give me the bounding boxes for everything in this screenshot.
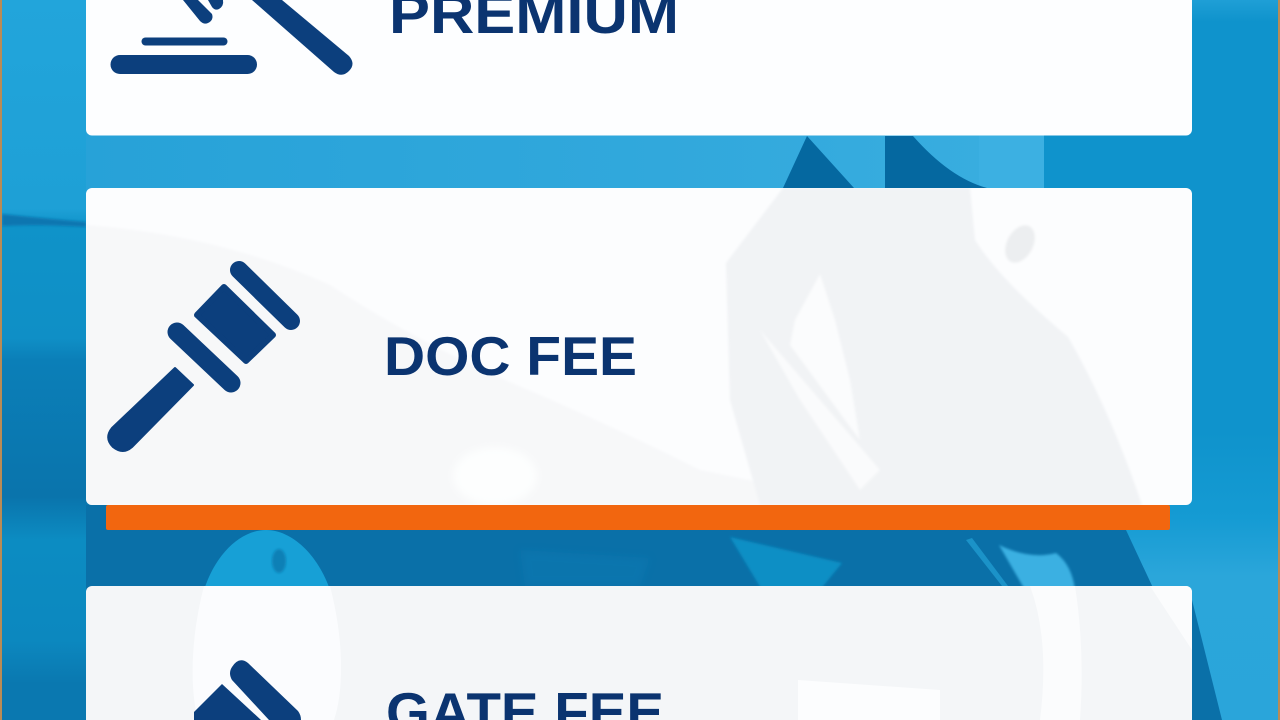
panel: gate fee card	[86, 586, 1192, 720]
icon: gavel, cropped	[194, 660, 301, 720]
panel: doc fee card	[86, 188, 1192, 505]
icon: gavel striking block	[110, 0, 352, 75]
icon: gavel	[108, 270, 291, 451]
panel: premium card	[86, 0, 1192, 136]
faint car hood silhouette	[86, 188, 1142, 505]
orange accent bar	[106, 505, 1170, 530]
faint car wheel and body silhouette	[1186, 586, 1192, 592]
heading: doc fee: DOC FEE	[384, 325, 637, 387]
